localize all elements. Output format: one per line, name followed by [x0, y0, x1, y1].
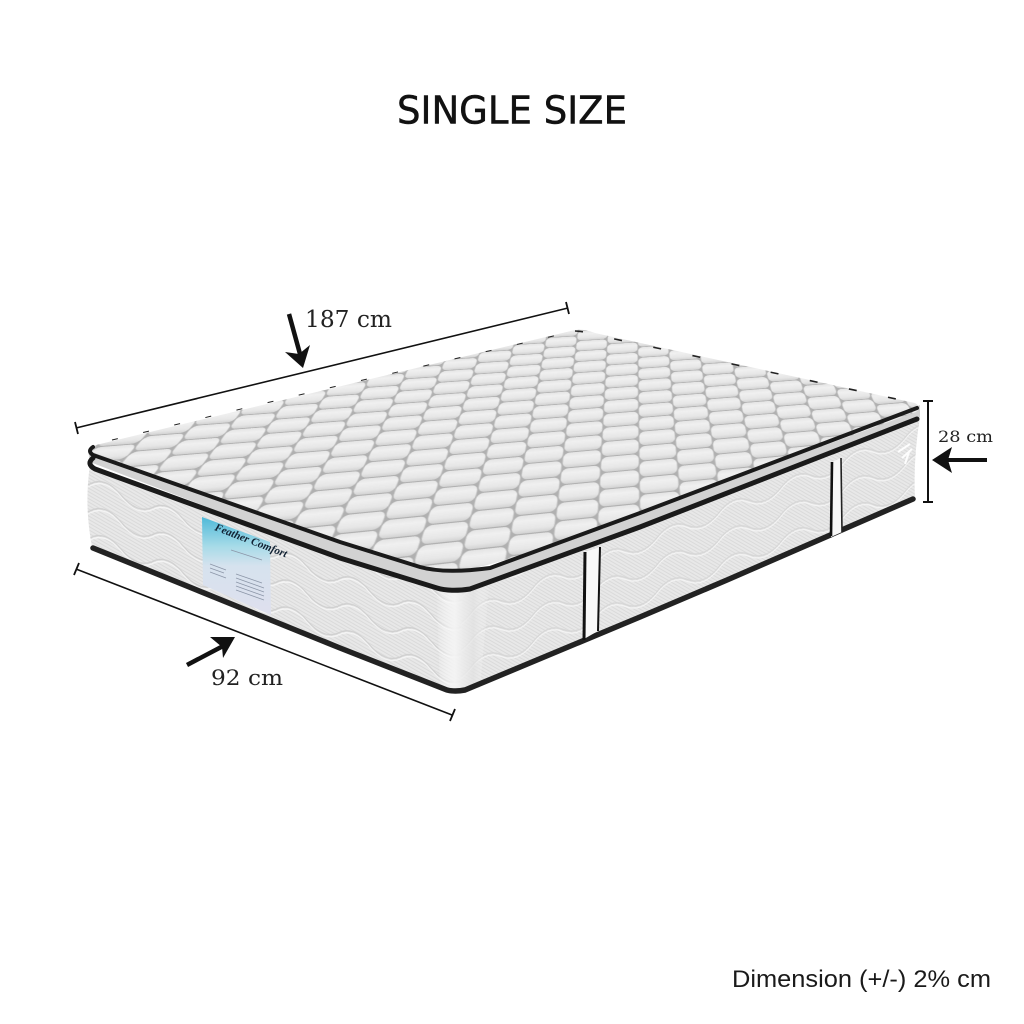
strap right	[831, 458, 842, 537]
length value: 187 cm	[305, 307, 392, 333]
mattress	[87, 330, 920, 694]
title: SINGLE SIZE	[397, 88, 627, 132]
width value: 92 cm	[211, 666, 283, 690]
product label: Feather Comfort	[212, 521, 290, 561]
dimension: length 187 cm	[74, 302, 570, 434]
lower piping	[90, 419, 917, 590]
height arrow	[932, 447, 987, 473]
strap front	[584, 547, 600, 640]
height measure line	[923, 401, 933, 502]
bottom piping	[93, 499, 913, 691]
upper piping	[90, 408, 917, 571]
dimension: width 92 cm	[73, 562, 456, 722]
height value: 28 cm	[938, 427, 993, 446]
rear edge piping	[112, 331, 915, 440]
width measure line	[74, 563, 455, 721]
product label	[202, 517, 290, 615]
mattress side faces	[88, 405, 920, 688]
tolerance note: Dimension (+/-) 2% cm	[732, 966, 991, 993]
dimension: height 28 cm	[923, 400, 993, 503]
width arrow	[187, 637, 235, 665]
length measure line	[75, 302, 569, 434]
feather logo on side	[898, 444, 912, 464]
length arrow	[285, 314, 310, 368]
quilted top surface	[92, 330, 918, 569]
piping, straps and product label	[87, 330, 920, 694]
